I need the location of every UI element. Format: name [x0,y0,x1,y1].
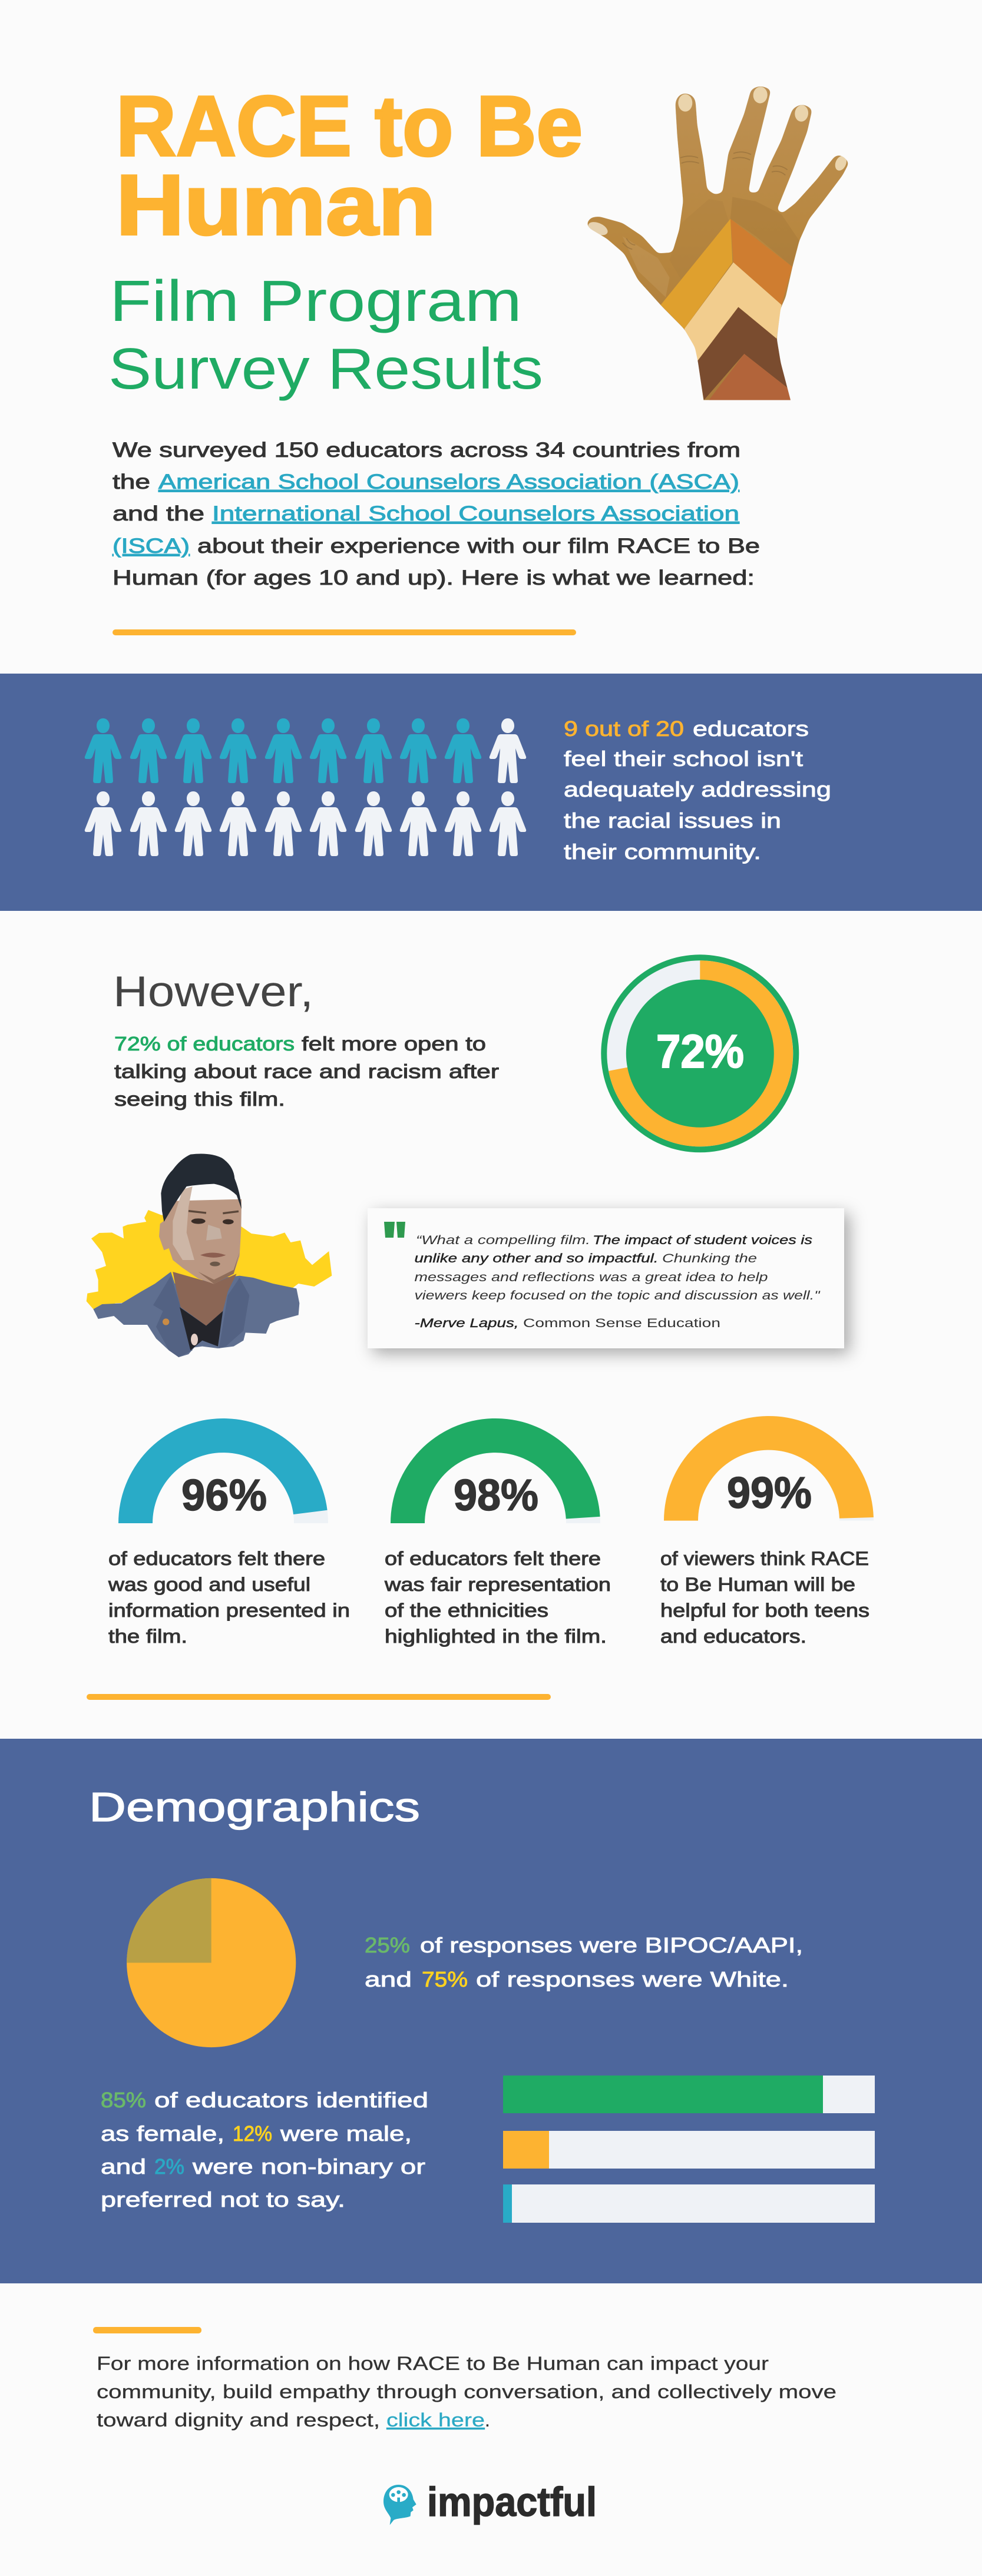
pictogram: 9 of 20 people highlighted [85,718,526,856]
subtitle: Film Program Survey Results: Survey Results [108,336,543,401]
quote text [415,1233,821,1330]
text: 98% caption: was fair representation [384,1574,611,1595]
text: 96% caption: of educators felt there [108,1548,325,1569]
text: race breakdown: and [365,1967,412,1991]
text: closing call to action: . [485,2409,490,2431]
text: 9 out of 20 educators feel [564,717,831,864]
text: 9 out of 20 educators feel: the racial issues in [564,808,781,833]
intro paragraph with links: We surveyed 150 educators across 34 countries from [113,439,740,462]
text: 99% caption [660,1548,869,1647]
text: 9 out of 20 educators feel: their community. [564,840,761,864]
quote text: -Merve Lapus, [415,1316,518,1330]
quote text: unlike any other and so impactful. [415,1251,659,1265]
text: 99% caption: helpful for both teens [660,1600,869,1621]
gauge: 98% [391,1418,600,1523]
title: RACE to Be Human [116,78,583,253]
chart: 72% donut: 72% [656,1025,744,1078]
callout: testimonial card [368,1208,844,1348]
text: gender breakdown: 12% [233,2121,272,2146]
text: 9 out of 20 educators feel: feel their school isn't [564,747,803,771]
text: 99% caption: of viewers think RACE [660,1548,869,1569]
quote text: Chunking the [662,1251,757,1265]
text: 9 out of 20 educators feel: educators [693,717,809,741]
intro paragraph with links: and the [113,502,204,525]
text: 72% of educators felt more open: felt more open to [302,1033,486,1055]
text: 96% caption: information presented in [108,1600,350,1621]
text: gender breakdown: and [101,2154,146,2179]
text: 72% of educators felt more open: talking about race and racism after [114,1060,499,1082]
text: 98% caption: of the ethnicities [385,1600,548,1621]
text: 9 out of 20 educators feel: 9 out of 20 [564,717,684,741]
quote text: viewers keep focused on the topic and discussion as well." [415,1288,821,1302]
text: gender breakdown: 85% [101,2088,146,2112]
quote text: “What a compelling film. [416,1233,590,1247]
text: 96% caption [108,1548,350,1647]
text: 96% caption: was good and useful [108,1574,310,1595]
gauge: 96%: 96% [181,1470,267,1520]
gauge: 98%: 98% [454,1470,538,1520]
chart: gender bars [503,2076,875,2223]
text: 96% caption: the film. [108,1626,187,1647]
quote text: Common Sense Education [523,1316,720,1330]
title: RACE to Be Human: RACE to Be [116,78,583,174]
text: race breakdown: 25% [365,1933,410,1957]
quote text: The impact of student voices is [593,1233,812,1247]
icon: quote mark [384,1222,405,1238]
text: 98% caption: of educators felt there [385,1548,601,1569]
intro paragraph with links: the [113,470,150,493]
text: race breakdown: 75% [422,1967,468,1991]
gauge: 96% [118,1418,328,1523]
panel: demographics [0,1739,982,2283]
text: closing call to action [97,2353,836,2431]
text: 99% caption: to Be Human will be [660,1574,855,1595]
text: 72% of educators felt more open: 72% of educators [114,1033,295,1055]
intro paragraph with links [113,439,760,589]
subtitle: Film Program Survey Results [108,268,543,401]
text: gender breakdown: preferred not to say. [101,2187,345,2212]
heading: However: However, [113,968,313,1016]
chart: 72% donut [601,954,799,1152]
text: race breakdown: of responses were White. [476,1967,789,1991]
intro paragraph with links: Human (for ages 10 and up). Here is what we learned: [113,566,755,589]
gauge: 99%: 99% [727,1468,812,1517]
text: 98% caption [384,1548,611,1647]
icon: raised hand with chevron wrist [579,79,854,400]
text: closing call to action: For more information on how RACE to Be Human can impact your [97,2353,769,2374]
logo: impactful: impactful [427,2479,597,2525]
text: 72% of educators felt more open: seeing this film. [114,1088,285,1110]
panel: 9 out of 20 educators [0,674,982,911]
text: closing call to action: toward dignity and respect, [97,2409,380,2431]
icon: head with film reel [383,2485,416,2525]
text: 9 out of 20 educators feel: adequately addressing [564,777,831,801]
heading: Demographics: Demographics [89,1784,420,1830]
intro paragraph with links: (ISCA) [113,535,190,558]
text: 72% of educators felt more open [114,1033,499,1110]
text: race breakdown [365,1933,803,1991]
portrait: Merve Lapus on yellow brush stroke [87,1154,332,1357]
intro paragraph with links: International School Counselors Association [212,502,739,525]
text: race breakdown: of responses were BIPOC/AAPI, [420,1933,803,1957]
quote text: messages and reflections was a great idea to help [415,1270,768,1284]
intro paragraph with links: American School Counselors Association (ASCA) [158,470,739,493]
text: gender breakdown: as female, [101,2121,224,2146]
text: closing call to action: community, build empathy through conversation, and collectively move [97,2381,836,2402]
intro paragraph with links: about their experience with our film RACE to Be [197,535,760,558]
text: 99% caption: and educators. [660,1626,806,1647]
text: gender breakdown: were male, [280,2121,412,2146]
subtitle: Film Program Survey Results: Film Program [110,268,522,333]
text: closing call to action: click here [386,2409,485,2431]
text: gender breakdown: 2% [154,2154,184,2179]
text: gender breakdown [101,2088,428,2212]
title: RACE to Be Human: Human [116,157,436,253]
chart: race pie [127,1878,296,2047]
text: gender breakdown: were non-binary or [192,2154,425,2179]
gauge: 99% [664,1416,874,1521]
text: gender breakdown: of educators identified [154,2088,428,2112]
text: 98% caption: highlighted in the film. [385,1626,607,1647]
